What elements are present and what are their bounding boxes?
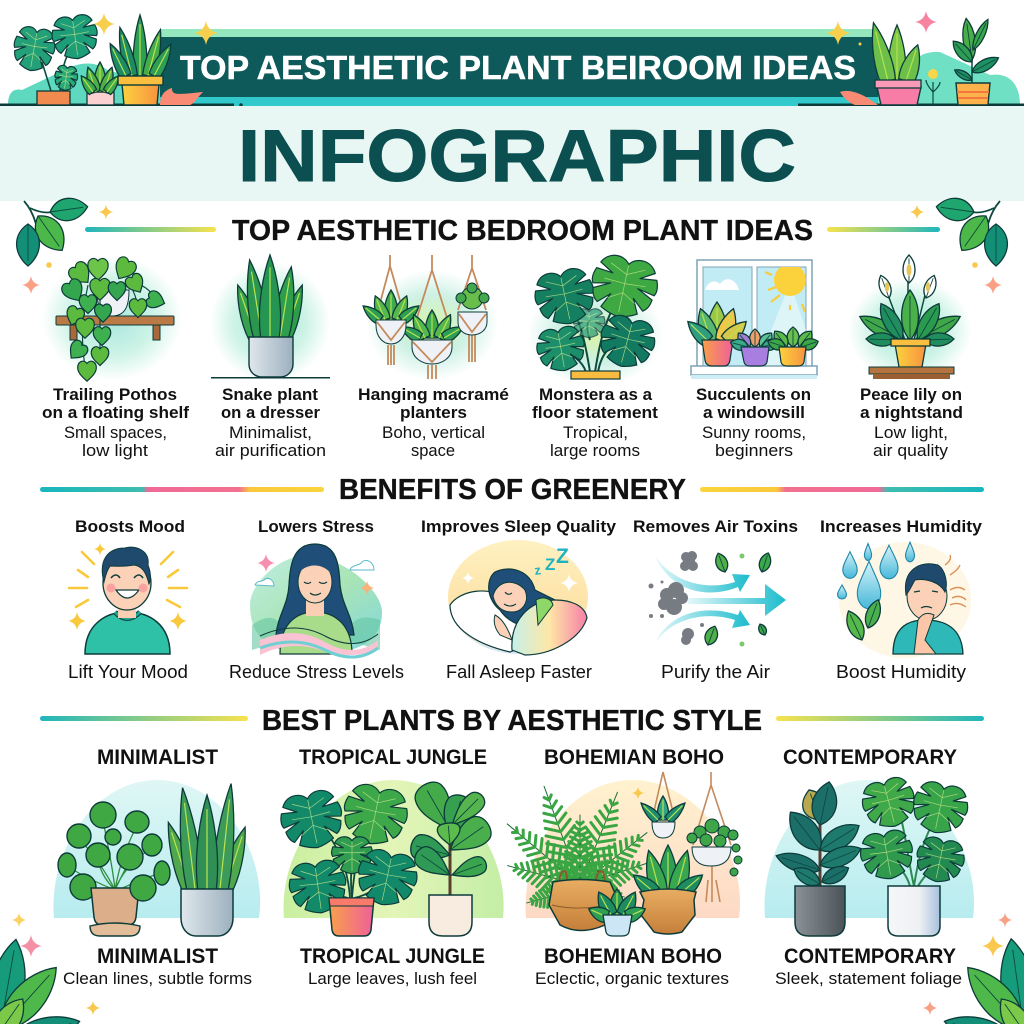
card: peace lily: air quality — [873, 442, 949, 460]
icon: happy man — [68, 543, 187, 654]
icon: snake plant on dresser — [210, 255, 330, 382]
card: macrame planters — [358, 255, 509, 460]
card: snake plant: Snake plant — [222, 386, 319, 404]
card: macrame planters: Hanging macramé — [358, 386, 509, 404]
style: minimalist: MINIMALIST — [97, 746, 218, 769]
card: snake plant: on a dresser — [221, 404, 321, 422]
style: minimalist — [53, 746, 260, 988]
icon: sleeping woman: Z — [545, 555, 555, 574]
section heading: best plants — [40, 705, 984, 737]
icon: sleeping woman: Z — [556, 545, 569, 568]
style: contemporary — [764, 746, 974, 988]
card: succulents: Sunny rooms, — [702, 424, 806, 442]
card: monstera: Tropical, — [563, 424, 628, 442]
card: macrame planters: Boho, vertical — [382, 424, 485, 442]
card: macrame planters: planters — [400, 404, 467, 422]
illustration: pilea and snake plant — [53, 780, 260, 936]
card: trailing pothos: on a floating shelf — [42, 404, 190, 422]
benefit: lowers stress: Reduce Stress Levels — [229, 661, 404, 682]
icon: window with succulents — [683, 260, 820, 379]
benefit: boosts mood — [68, 517, 188, 682]
card: peace lily: a nightstand — [860, 404, 963, 422]
section heading: best plants: BEST PLANTS BY AESTHETIC STYLE — [262, 705, 762, 737]
section heading: top aesthetic ideas — [85, 215, 940, 247]
card: trailing pothos: Trailing Pothos — [53, 386, 177, 404]
card: succulents: a windowsill — [703, 404, 805, 422]
benefit: increases humidity: Boost Humidity — [836, 661, 967, 682]
main title: INFOGRAPHIC — [238, 116, 796, 197]
card: trailing pothos: low light — [82, 442, 148, 460]
header plants left — [10, 13, 218, 105]
card: succulents — [683, 260, 820, 460]
benefit: lowers stress: Lowers Stress — [258, 517, 374, 536]
section heading: top aesthetic ideas: TOP AESTHETIC BEDROOM PLANT IDEAS — [232, 215, 813, 247]
benefit: removes air toxins — [633, 517, 798, 682]
style: tropical jungle: Large leaves, lush feel — [308, 969, 477, 988]
style: contemporary: CONTEMPORARY — [784, 945, 956, 968]
card: monstera: Monstera as a — [539, 386, 653, 404]
card: snake plant: air purification — [215, 442, 326, 460]
benefit: sleep quality: Improves Sleep Quality — [421, 517, 617, 536]
icon: calm woman — [250, 544, 382, 657]
illustration: fern, baskets and hangers — [497, 772, 742, 936]
icon: air purifying arrows — [648, 551, 786, 647]
card: monstera — [527, 251, 663, 460]
corner branch: top left — [17, 196, 113, 294]
benefit: boosts mood: Lift Your Mood — [68, 661, 188, 682]
card: monstera: large rooms — [550, 442, 640, 460]
section heading: benefits: BENEFITS OF GREENERY — [339, 474, 686, 506]
style: bohemian boho: BOHEMIAN BOHO — [544, 945, 722, 968]
card: snake plant: Minimalist, — [229, 424, 312, 442]
style: minimalist: MINIMALIST — [97, 945, 218, 968]
illustration: monstera and fiddle leaf fig — [276, 777, 504, 936]
icon: sleeping woman — [448, 540, 588, 655]
corner leaves: bottom left — [0, 913, 100, 1024]
benefit: removes air toxins: Removes Air Toxins — [633, 517, 798, 536]
style: contemporary: Sleek, statement foliage — [775, 969, 962, 988]
card: peace lily: Peace lily on — [860, 386, 962, 404]
card: trailing pothos — [42, 255, 190, 460]
style: tropical jungle — [276, 746, 504, 988]
icon: hanging macrame — [360, 255, 498, 380]
card: succulents: Succulents on — [696, 386, 811, 404]
card: macrame planters: space — [411, 442, 455, 460]
style: bohemian boho — [497, 746, 742, 988]
header plants right — [826, 11, 1001, 105]
benefit: boosts mood: Boosts Mood — [75, 517, 185, 536]
card: peace lily: Low light, — [874, 424, 948, 442]
benefit: sleep quality — [421, 517, 617, 682]
benefit: increases humidity — [820, 517, 983, 682]
section heading: benefits — [40, 474, 984, 506]
icon: peace lily on nightstand — [848, 255, 972, 382]
icon: monstera floor plant — [532, 254, 658, 380]
style: contemporary: CONTEMPORARY — [783, 746, 957, 769]
icon: pothos on shelf — [42, 255, 182, 381]
card: peace lily — [848, 255, 972, 460]
corner leaves: bottom right — [923, 913, 1024, 1024]
banner title: TOP AESTHETIC PLANT BEIROOM IDEAS — [180, 49, 856, 86]
card: trailing pothos: Small spaces, — [64, 424, 167, 442]
style: bohemian boho: Eclectic, organic textures — [535, 969, 729, 988]
benefit: sleep quality: Fall Asleep Faster — [446, 661, 592, 682]
card: succulents: beginners — [715, 442, 793, 460]
style: minimalist: Clean lines, subtle forms — [63, 969, 252, 988]
benefit: lowers stress — [229, 517, 404, 682]
illustration: rubber plant and monstera — [764, 774, 974, 936]
benefit: increases humidity: Increases Humidity — [820, 517, 983, 536]
style: bohemian boho: BOHEMIAN BOHO — [544, 746, 724, 769]
style: tropical jungle: TROPICAL JUNGLE — [300, 945, 485, 968]
style: tropical jungle: TROPICAL JUNGLE — [299, 746, 487, 769]
benefit: removes air toxins: Purify the Air — [661, 661, 770, 682]
icon: drops and man — [838, 542, 971, 658]
main title panel — [0, 106, 1024, 201]
corner branch: top right — [910, 196, 1007, 294]
header band — [0, 29, 1024, 107]
card: monstera: floor statement — [532, 404, 659, 422]
card: snake plant — [210, 255, 330, 460]
icon: sleeping woman: z — [533, 562, 542, 578]
